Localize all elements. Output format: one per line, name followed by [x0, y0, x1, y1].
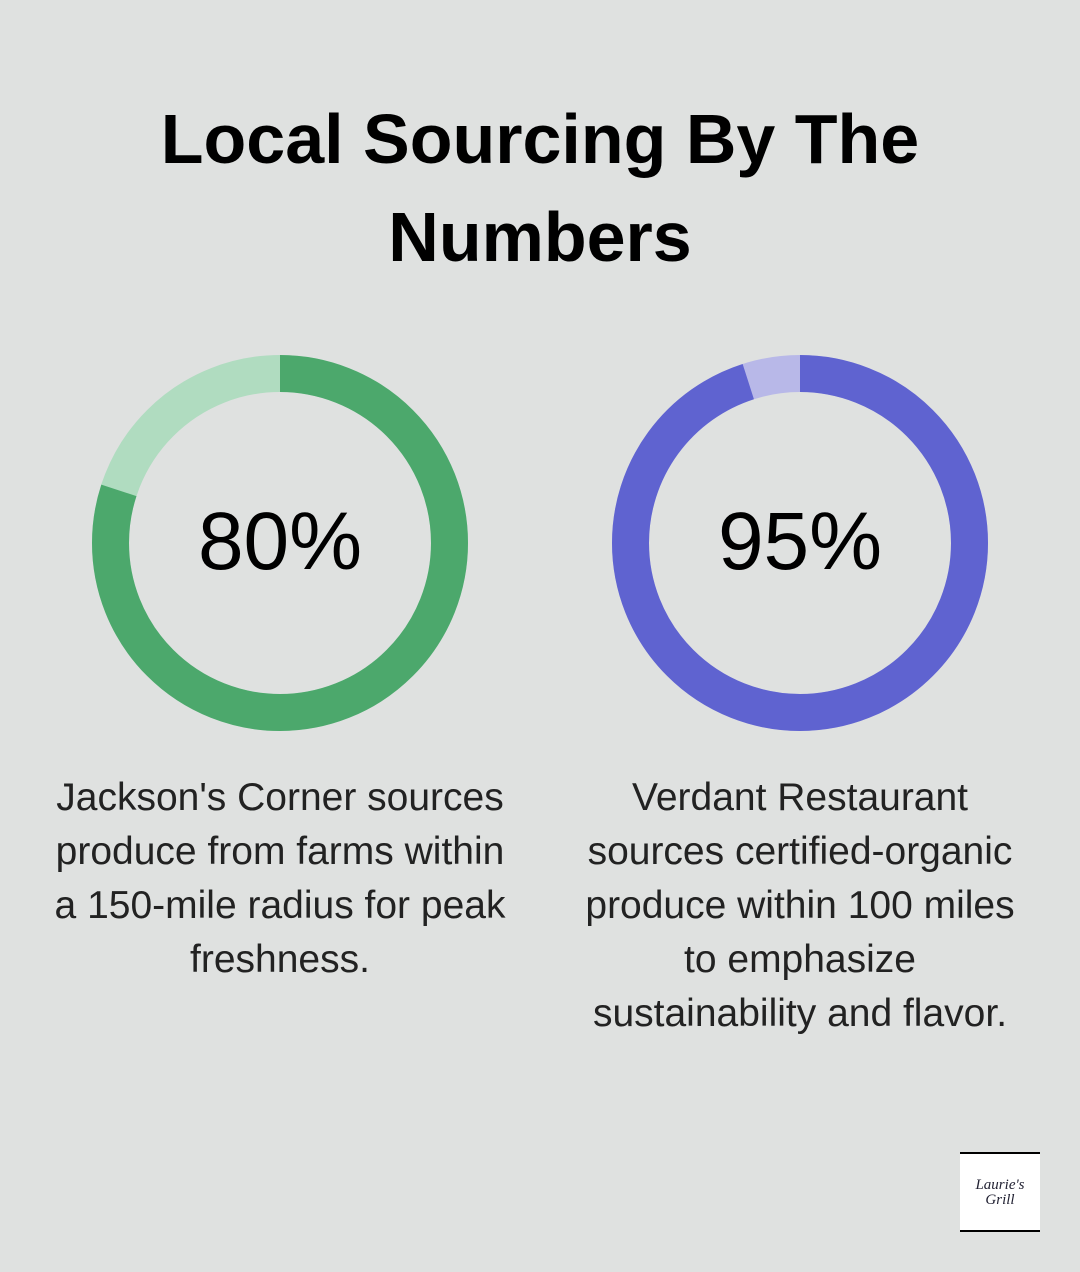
- text: Jackson's Corner: a 150-mile radius for peak: [55, 884, 505, 927]
- donut 80: [110, 374, 450, 712]
- stat number 95: 95%: [718, 496, 882, 587]
- title: Numbers: [388, 198, 692, 276]
- text: Verdant: Verdant Restaurant: [632, 776, 968, 819]
- stat number 80: 80%: [198, 496, 362, 587]
- logo: Grill: [985, 1192, 1015, 1208]
- text: Verdant: [585, 776, 1015, 1035]
- text: Jackson's Corner: [55, 776, 506, 981]
- donut 95: [630, 374, 970, 712]
- text: Verdant: produce within 100 miles: [585, 884, 1015, 927]
- title: [161, 100, 919, 276]
- text: Verdant: sources certified-organic: [588, 830, 1012, 873]
- text: Verdant: to emphasize: [684, 938, 916, 981]
- text: Jackson's Corner: Jackson's Corner sources: [56, 776, 504, 819]
- title: Local Sourcing By The: [161, 100, 919, 178]
- logo: Laurie's: [975, 1177, 1025, 1193]
- text: Jackson's Corner: freshness.: [190, 938, 370, 981]
- text: Verdant: sustainability and flavor.: [593, 992, 1007, 1035]
- logo: [960, 1152, 1040, 1232]
- text: Jackson's Corner: produce from farms within: [56, 830, 504, 873]
